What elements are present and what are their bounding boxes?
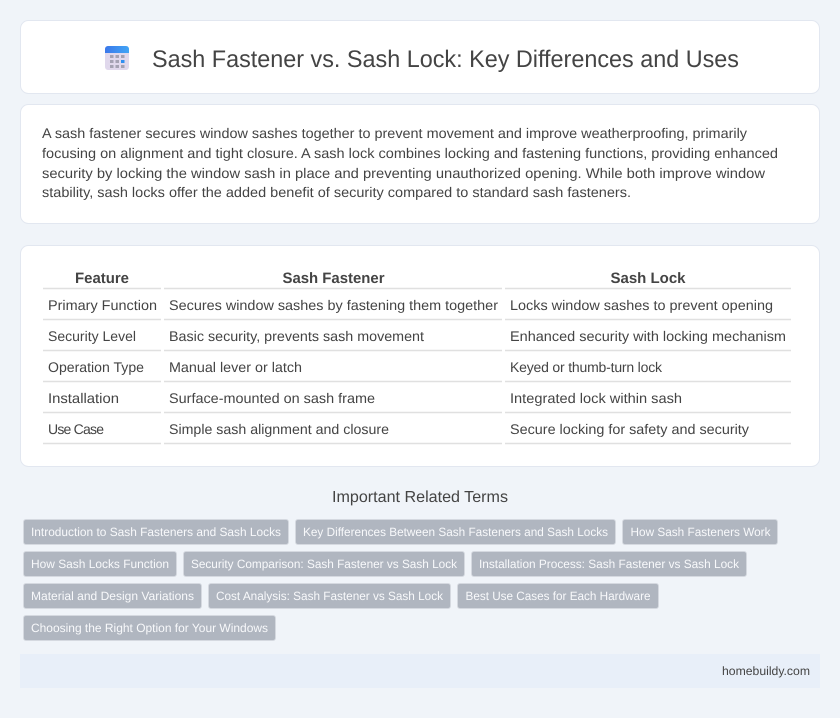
tag xyxy=(472,552,746,576)
tag xyxy=(24,616,276,640)
row: security level xyxy=(43,328,791,350)
tag: Best Use Cases for Each Hardware xyxy=(466,589,651,603)
table header: Feature xyxy=(75,270,129,287)
tag: How Sash Locks Function xyxy=(31,557,169,571)
row: primary function xyxy=(43,297,791,320)
summary text xyxy=(42,125,778,200)
tag xyxy=(24,552,176,576)
tag xyxy=(622,520,778,544)
row: installation xyxy=(43,390,791,412)
summary text: security by locking the window sash in place and preventing unauthorized opening. While both improve window xyxy=(42,165,766,181)
summary text: stability, sash locks offer the added benefit of security compared to standard sash fasteners. xyxy=(42,184,631,200)
row: primary function: Secures window sashes by fastening them together xyxy=(169,297,498,313)
row: installation: Integrated lock within sash xyxy=(510,390,682,406)
row: use case: Simple sash alignment and closure xyxy=(169,421,389,437)
icon: calendar window xyxy=(105,46,129,70)
footer xyxy=(20,654,820,688)
row: operation type: Keyed or thumb-turn lock xyxy=(510,359,663,375)
panel: summary xyxy=(20,104,820,224)
row: primary function: Primary Function xyxy=(48,297,157,313)
row: operation type: Operation Type xyxy=(48,359,144,375)
tag xyxy=(458,584,658,608)
tag: Choosing the Right Option for Your Windows xyxy=(31,621,268,635)
table header: Sash Fastener xyxy=(282,270,385,287)
tag xyxy=(208,584,450,608)
tag: Key Differences Between Sash Fasteners and Sash Locks xyxy=(303,525,608,539)
row: security level: Enhanced security with locking mechanism xyxy=(510,328,786,344)
row: operation type: Manual lever or latch xyxy=(169,359,302,375)
tag list xyxy=(24,520,778,640)
row: security level: Security Level xyxy=(48,328,136,344)
panel: header xyxy=(20,20,820,94)
table header: Sash Lock xyxy=(610,270,686,287)
table header xyxy=(43,270,791,288)
row: use case xyxy=(43,421,791,444)
summary text: focusing on alignment and tight closure. A sash lock combines locking and fastening functions, providing enhanced xyxy=(42,145,778,161)
row: use case: Secure locking for safety and security xyxy=(510,421,749,437)
tag xyxy=(24,584,202,608)
tag xyxy=(24,520,288,544)
tag: Material and Design Variations xyxy=(31,589,194,603)
row: primary function: Locks window sashes to prevent opening xyxy=(510,297,773,313)
tag: Cost Analysis: Sash Fastener vs Sash Lock xyxy=(216,589,444,603)
summary text: A sash fastener secures window sashes together to prevent movement and improve weatherproofing, primarily xyxy=(42,125,747,141)
row: operation type xyxy=(43,359,791,382)
tag xyxy=(296,520,616,544)
tag: Security Comparison: Sash Fastener vs Sash Lock xyxy=(191,557,458,571)
tag: Introduction to Sash Fasteners and Sash Locks xyxy=(31,525,281,539)
row: security level: Basic security, prevents sash movement xyxy=(169,328,424,344)
row: use case: Use Case xyxy=(48,421,104,437)
footer credit: homebuildy.com xyxy=(722,664,810,678)
tag: Installation Process: Sash Fastener vs Sash Lock xyxy=(479,557,740,571)
tag: How Sash Fasteners Work xyxy=(630,525,771,539)
heading: related terms: Important Related Terms xyxy=(332,489,508,506)
title: Sash Fastener vs. Sash Lock: Key Differences and Uses xyxy=(152,46,739,73)
panel: comparison table xyxy=(20,246,820,466)
row: installation: Installation xyxy=(48,390,119,406)
row: installation: Surface-mounted on sash frame xyxy=(169,390,375,406)
tag xyxy=(184,552,464,576)
